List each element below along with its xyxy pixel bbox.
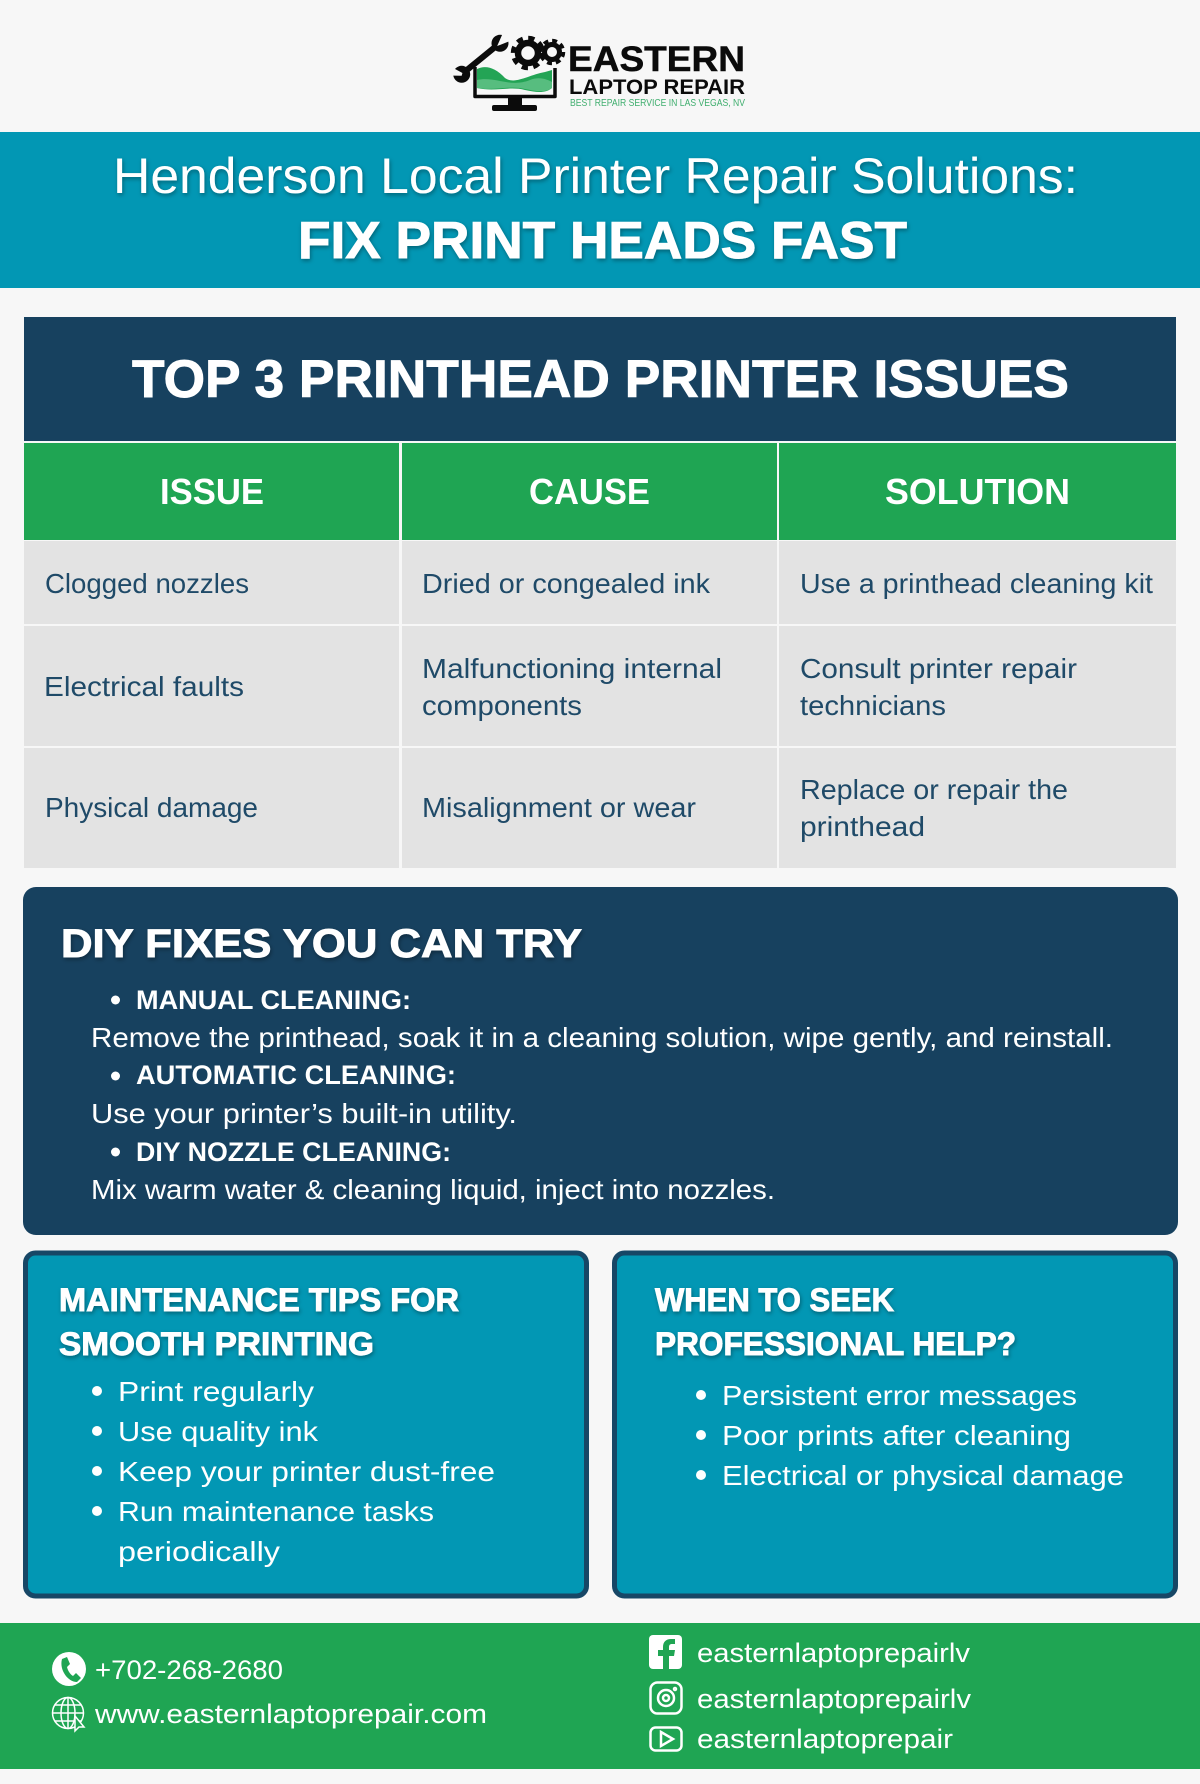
- phone number: +702-268-2680: [95, 1655, 283, 1685]
- facebook handle: easternlaptoprepairlv: [697, 1638, 971, 1668]
- instagram handle: easternlaptoprepairlv: [697, 1684, 972, 1714]
- list: maintenance tips: Run maintenance tasks: [118, 1496, 434, 1527]
- fix: DIY nozzle cleaning: DIY NOZZLE CLEANING:: [136, 1137, 451, 1167]
- fix: manual cleaning: Remove the printhead, soak it in a cleaning solution, wipe gently, and reinstall.: [91, 1022, 1113, 1053]
- logo: Eastern Laptop Repair: [449, 32, 745, 111]
- logo wordmark: LAPTOP REPAIR: [569, 76, 745, 99]
- panel: maintenance tips: [26, 1253, 586, 1596]
- table header row: SOLUTION: [885, 471, 1070, 512]
- heading: maintenance tips: [59, 1282, 459, 1362]
- icon: monitor with green waves, wrench and gears: [449, 32, 564, 111]
- list: professional help signs: [696, 1380, 1124, 1491]
- fix: automatic cleaning: [91, 1060, 517, 1129]
- fix: automatic cleaning: AUTOMATIC CLEANING:: [136, 1060, 456, 1090]
- list: maintenance tips: Print regularly: [118, 1376, 314, 1407]
- heading: professional help: PROFESSIONAL HELP?: [655, 1326, 1016, 1362]
- table header row: ISSUE: [160, 471, 264, 512]
- table row: clogged nozzles: Clogged nozzles: [45, 568, 249, 599]
- fix: manual cleaning: [91, 985, 1113, 1053]
- icon: facebook: [649, 1635, 682, 1669]
- list: maintenance tips: Use quality ink: [118, 1416, 319, 1447]
- table row: electrical faults: technicians: [800, 690, 946, 721]
- table row: electrical faults: Electrical faults: [44, 671, 244, 702]
- table row: electrical faults: Malfunctioning internal: [422, 653, 722, 684]
- table header row: CAUSE: [529, 471, 650, 512]
- table row: clogged nozzles: Dried or congealed ink: [422, 568, 711, 599]
- table row: physical damage: printhead: [800, 811, 925, 842]
- youtube handle: easternlaptoprepair: [697, 1724, 953, 1754]
- title banner: [0, 132, 1200, 288]
- footer: contact details: [0, 1623, 1200, 1769]
- fix: manual cleaning: MANUAL CLEANING:: [136, 985, 411, 1015]
- icon: globe: [52, 1698, 84, 1731]
- table row: clogged nozzles: [24, 541, 1176, 624]
- heading: maintenance tips: MAINTENANCE TIPS FOR: [59, 1282, 459, 1318]
- logo wordmark: BEST REPAIR SERVICE IN LAS VEGAS, NV: [570, 98, 745, 109]
- icon: phone: [52, 1652, 86, 1686]
- heading: professional help: [655, 1282, 1016, 1362]
- list: maintenance tips: Keep your printer dust-free: [118, 1456, 495, 1487]
- title line 1: Henderson Local Printer Repair Solutions:: [113, 148, 1078, 204]
- panel: when to seek professional help: [614, 1253, 1176, 1596]
- fix: automatic cleaning: Use your printer’s built-in utility.: [91, 1098, 517, 1129]
- fix: DIY nozzle cleaning: Mix warm water & cleaning liquid, inject into nozzles.: [91, 1174, 775, 1205]
- panel: DIY fixes: [23, 887, 1178, 1235]
- list: maintenance tips: periodically: [118, 1536, 280, 1567]
- table row: physical damage: [24, 748, 1176, 868]
- heading: DIY fixes: DIY FIXES YOU CAN TRY: [61, 922, 582, 966]
- table row: physical damage: Physical damage: [45, 792, 258, 823]
- table row: physical damage: Replace or repair the: [800, 774, 1068, 805]
- heading: professional help: WHEN TO SEEK: [655, 1282, 894, 1318]
- list: maintenance tips: [92, 1376, 495, 1567]
- table row: clogged nozzles: Use a printhead cleaning kit: [800, 568, 1153, 599]
- fix: DIY nozzle cleaning: [91, 1137, 775, 1205]
- table heading: TOP 3 PRINTHEAD PRINTER ISSUES: [132, 350, 1069, 409]
- list: professional help signs: Electrical or physical damage: [722, 1460, 1124, 1491]
- heading: maintenance tips: SMOOTH PRINTING: [59, 1326, 374, 1362]
- website: www.easternlaptoprepair.com: [94, 1699, 487, 1729]
- panel: top 3 issues table: [24, 317, 1176, 868]
- list: professional help signs: Persistent error messages: [722, 1380, 1077, 1411]
- table row: electrical faults: components: [422, 690, 582, 721]
- table row: electrical faults: [24, 626, 1176, 746]
- table header row: [24, 443, 1176, 540]
- table row: physical damage: Misalignment or wear: [422, 792, 696, 823]
- icon: youtube: [650, 1728, 682, 1750]
- table row: electrical faults: Consult printer repair: [800, 653, 1077, 684]
- table heading: [24, 317, 1176, 441]
- list: professional help signs: Poor prints after cleaning: [722, 1420, 1071, 1451]
- logo wordmark: [568, 40, 745, 109]
- icon: instagram: [650, 1682, 682, 1714]
- logo wordmark: EASTERN: [568, 40, 745, 79]
- title line 2: FIX PRINT HEADS FAST: [298, 212, 907, 270]
